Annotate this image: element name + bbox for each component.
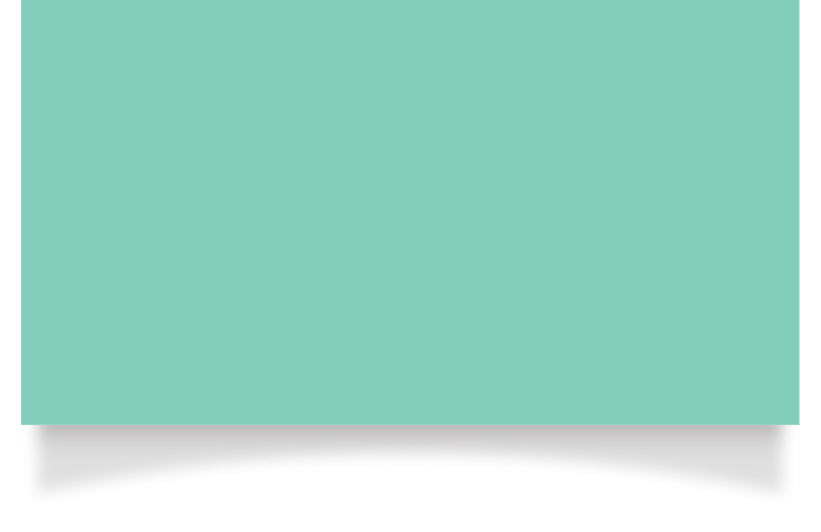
curved drop shadow bbox=[38, 412, 782, 493]
teal panel bbox=[22, 0, 799, 424]
